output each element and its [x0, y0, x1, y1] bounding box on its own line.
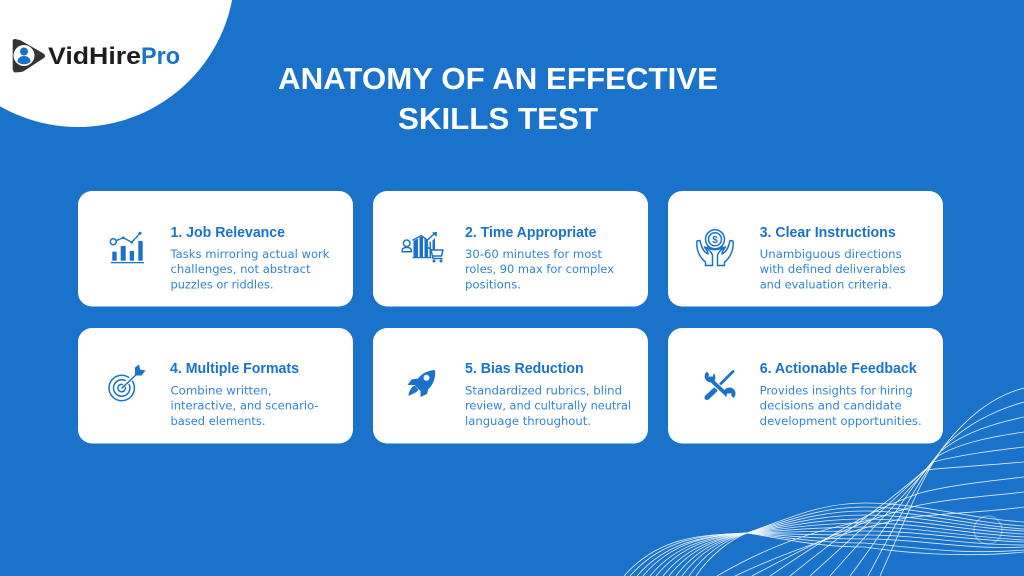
panel: 4. Multiple Formats — [78, 328, 353, 444]
description: based elements. — [170, 414, 266, 428]
logo icon — [13, 39, 45, 72]
logo badge: white corner circle — [0, 0, 235, 127]
description: with defined deliverables — [760, 262, 906, 276]
description: review, and culturally neutral — [465, 398, 631, 412]
icon: hands holding a coin — [697, 230, 733, 266]
title — [278, 61, 718, 136]
description: puzzles or riddles. — [170, 278, 274, 292]
description — [465, 247, 614, 292]
description: Standardized rubrics, blind — [465, 384, 622, 398]
icon: rocket — [408, 370, 435, 397]
icon: person, growth chart and cart — [402, 232, 443, 262]
logo: VidHirePro: Pro — [141, 43, 180, 70]
description — [760, 247, 906, 292]
icon: target with arrow — [109, 364, 146, 401]
icon: hands holding a coin: $ — [712, 235, 718, 246]
panel: 1. Job Relevance — [78, 191, 353, 306]
heading: 5. Bias Reduction — [465, 361, 584, 377]
description: and evaluation criteria. — [760, 278, 892, 292]
description: positions. — [465, 278, 521, 292]
description: Unambiguous directions — [760, 247, 902, 261]
description — [169, 247, 330, 292]
decorative wave graphic — [624, 388, 1024, 576]
heading: 4. Multiple Formats — [170, 361, 299, 377]
description — [465, 384, 631, 428]
heading: 3. Clear Instructions — [760, 225, 896, 241]
description: 30-60 minutes for most — [465, 247, 603, 261]
icon: wrench and screwdriver — [705, 370, 736, 400]
description — [760, 384, 922, 428]
logo wordmark: VidHire — [48, 43, 141, 70]
description: Provides insights for hiring — [760, 384, 913, 398]
description — [170, 384, 318, 428]
panel: 6. Actionable Feedback — [668, 328, 943, 444]
logo: VidHirePro — [13, 39, 180, 72]
description: Tasks mirroring actual work — [169, 247, 330, 261]
panel: 3. Clear Instructions — [668, 191, 943, 306]
description: challenges, not abstract — [170, 262, 311, 276]
panel: 5. Bias Reduction — [373, 328, 648, 444]
description: decisions and candidate — [760, 398, 902, 412]
title: SKILLS TEST — [398, 101, 598, 136]
description: development opportunities. — [760, 414, 922, 428]
heading: 6. Actionable Feedback — [760, 361, 918, 377]
panel: 2. Time Appropriate — [373, 191, 648, 306]
heading: 1. Job Relevance — [170, 225, 285, 241]
description: roles, 90 max for complex — [465, 262, 614, 276]
icon: bar chart with trend line — [110, 232, 144, 263]
description: interactive, and scenario- — [170, 398, 318, 412]
description: Combine written, — [170, 384, 272, 398]
heading: 2. Time Appropriate — [465, 225, 596, 241]
description: language throughout. — [465, 414, 591, 428]
title: ANATOMY OF AN EFFECTIVE — [278, 61, 718, 96]
